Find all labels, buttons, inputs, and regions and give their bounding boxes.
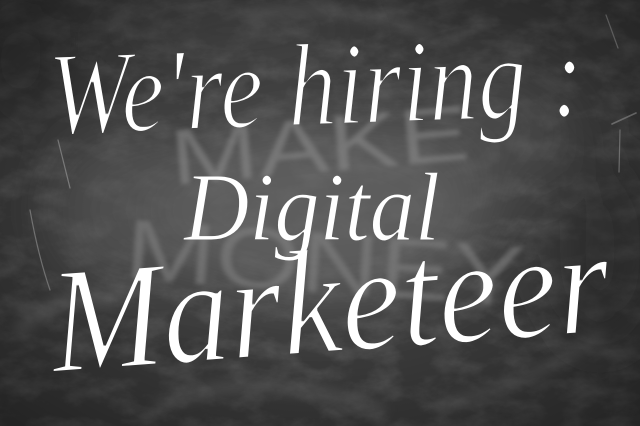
ghost lettering: make money — [122, 88, 528, 325]
ghost lettering: make money: MAKE — [166, 88, 473, 202]
ghost lettering: make money: MONEY — [122, 202, 528, 325]
text: Digital: Digital — [182, 154, 440, 262]
chalk scratches — [30, 15, 636, 290]
